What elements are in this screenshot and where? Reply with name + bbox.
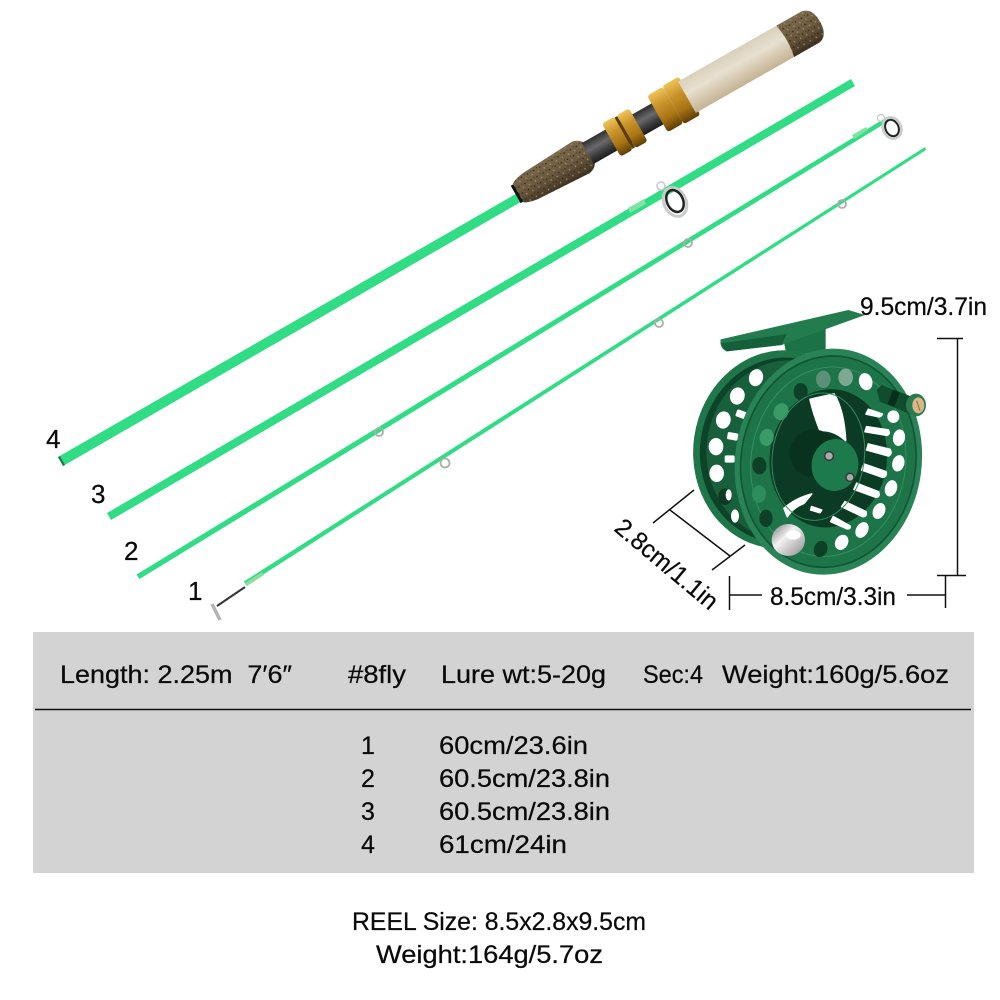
spec: weight: Weight:160g/5.6oz: [722, 661, 949, 689]
guide ring on section 3: [657, 182, 691, 220]
row 2 length: 60.5cm/23.8in: [439, 765, 610, 793]
spool interior: [761, 382, 896, 535]
label: depth: 2.8cm/1.1in: [609, 513, 724, 616]
rod section 3: [107, 79, 855, 520]
section number 3: 3: [91, 479, 105, 509]
guide on section 2: [375, 428, 383, 436]
back holes: [709, 367, 765, 523]
spool hub: [764, 387, 873, 526]
fly reel: [680, 310, 937, 587]
dimension: height: [860, 293, 987, 576]
reel handle: [877, 385, 926, 416]
row 4 number: 4: [361, 831, 375, 859]
front rim holes: [832, 372, 906, 552]
line guard ball: [772, 524, 805, 556]
tip ring on section 2: [878, 114, 905, 142]
dimension: width: [729, 575, 946, 611]
section number 4: 4: [46, 424, 60, 454]
row 1 length: 60cm/23.6in: [439, 732, 588, 760]
spec: sections: Sec:4: [643, 661, 703, 689]
guide on section 1: [440, 458, 450, 468]
section number 1: 1: [188, 576, 202, 606]
row 3 length: 60.5cm/23.8in: [439, 798, 610, 826]
dimension: depth: [609, 490, 745, 616]
guide on section 2: [684, 239, 692, 247]
handle: [505, 2, 831, 214]
guide on section 1: [838, 200, 846, 208]
rod section 1: [212, 147, 926, 620]
spec: length: Length: 2.25m 7′6″: [60, 661, 292, 689]
section number 2: 2: [124, 536, 138, 566]
spec: line weight: #8fly: [348, 661, 407, 689]
spool openings: [784, 394, 891, 529]
label: height: 9.5cm/3.7in: [860, 293, 987, 321]
spec table panel: [33, 632, 974, 873]
rod section 2: [136, 114, 905, 579]
row 1 number: 1: [361, 732, 375, 760]
spec: lure weight: Lure wt:5-20g: [441, 661, 606, 689]
reel weight caption: Weight:164g/5.7oz: [376, 941, 603, 969]
rod section 4 with handle: [58, 2, 831, 466]
back plate: [680, 339, 883, 560]
row 3 number: 3: [361, 798, 375, 826]
front plate: [720, 336, 937, 587]
row 2 number: 2: [361, 765, 375, 793]
row 4 length: 61cm/24in: [439, 831, 567, 859]
reel size caption: REEL Size: 8.5x2.8x9.5cm: [352, 908, 646, 936]
guide on section 1: [655, 319, 663, 327]
label: width: 8.5cm/3.3in: [770, 583, 896, 611]
reel foot: [720, 310, 865, 357]
